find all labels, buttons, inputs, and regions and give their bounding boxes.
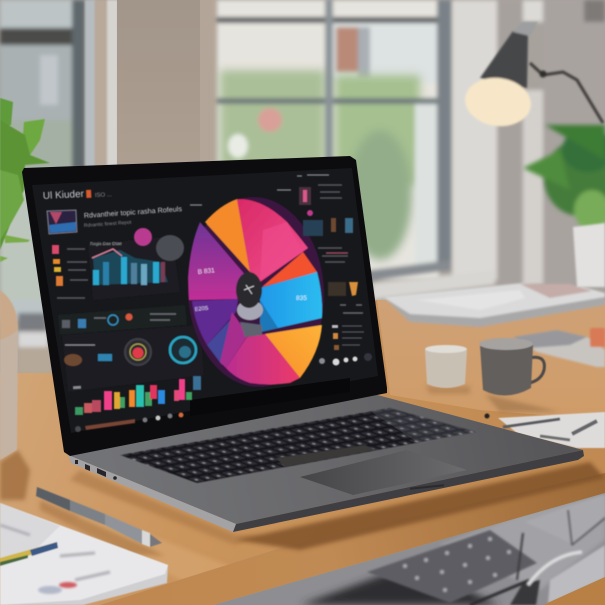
wedge: orange xyxy=(205,199,250,272)
area and bar chart: Regis Dae Dtae xyxy=(90,241,122,246)
right column panels xyxy=(190,175,372,366)
left window xyxy=(0,0,85,374)
wedge: dark purple xyxy=(192,299,238,345)
dashboard header text xyxy=(43,189,183,229)
wedge: red orange xyxy=(262,252,317,287)
desk front edge xyxy=(100,473,605,605)
screen xyxy=(32,168,378,433)
wedge: blue purple xyxy=(207,318,232,365)
wedge: pink xyxy=(237,199,308,282)
front edge xyxy=(233,450,584,532)
papers stack on the right xyxy=(383,283,605,327)
laptop xyxy=(22,156,584,532)
beige wall panel xyxy=(117,0,201,170)
trackpad xyxy=(300,450,467,495)
centre shadow and hub xyxy=(240,322,262,337)
wedge: magenta sliver xyxy=(220,312,248,368)
icon: dark mug xyxy=(479,338,544,396)
donut pie chart: 835 xyxy=(296,295,307,302)
centre window xyxy=(217,0,452,283)
bottom bar chart xyxy=(73,376,201,415)
wedge: pink lower xyxy=(226,334,300,384)
left vase xyxy=(0,290,18,460)
bezel hinge xyxy=(190,378,350,416)
side ports xyxy=(75,460,117,480)
wedge: magenta xyxy=(188,222,247,300)
dashboard header text: Ul Kiuder xyxy=(43,189,85,202)
lid bezel xyxy=(22,156,387,456)
sketch paper with pens xyxy=(484,412,605,448)
blurred keyboard xyxy=(367,530,537,603)
right plant with white pot xyxy=(523,125,605,287)
left plant xyxy=(0,98,50,262)
side edge xyxy=(68,455,236,532)
pie labels: B 831 xyxy=(197,267,215,276)
thumbnail tile xyxy=(47,210,77,234)
grey tile xyxy=(156,235,184,261)
desk under-laptop shadow xyxy=(236,462,605,550)
taskbar strip xyxy=(75,412,184,432)
desk right tone xyxy=(377,300,605,420)
light column xyxy=(85,0,96,170)
area and bar chart xyxy=(88,236,180,300)
keyboard xyxy=(120,408,476,483)
wedge: yellow xyxy=(265,325,322,378)
gauges row xyxy=(62,325,204,392)
shelf cable and stand xyxy=(470,495,605,605)
gauge: red dial xyxy=(125,339,151,365)
area under desk: shelf with blurred keyboard xyxy=(213,493,605,605)
notebook bottom left xyxy=(0,503,168,605)
small stack and eraser xyxy=(513,328,605,367)
donut pie chart xyxy=(183,194,329,390)
mid status row xyxy=(58,305,187,335)
beige pillar xyxy=(95,0,118,170)
gauge: blue dial xyxy=(170,337,196,363)
pen on desk xyxy=(36,487,162,547)
wedge: blue xyxy=(260,272,322,332)
dashboard header text: Rdvantic finest Repot xyxy=(84,220,132,229)
donut pie chart: E20S xyxy=(195,306,209,313)
pink orb xyxy=(134,228,152,246)
window jamb and sill xyxy=(372,0,605,300)
icon: white coffee cup xyxy=(425,345,467,388)
side list icons xyxy=(52,245,88,298)
dashboard header text: Rdvantheir topic rasha Rofeuls xyxy=(84,204,183,220)
desk wood grain and shadows xyxy=(0,386,560,590)
lamp xyxy=(462,22,603,130)
dashboard header text: ISO ... xyxy=(95,192,112,199)
wooden desk surface xyxy=(0,300,605,605)
laptop base xyxy=(68,393,583,524)
